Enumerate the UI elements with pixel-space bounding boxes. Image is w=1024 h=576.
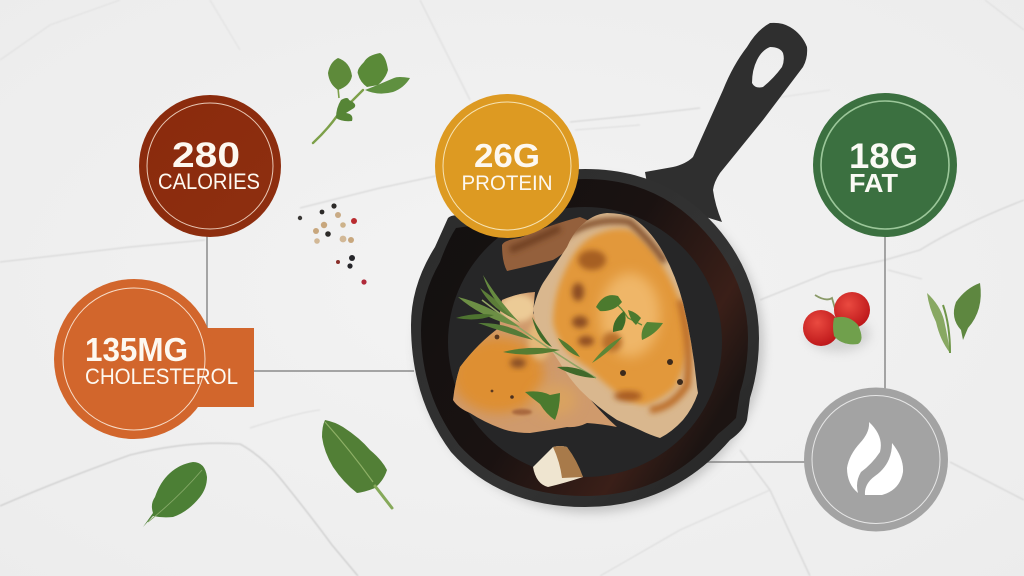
- skillet: [411, 23, 807, 513]
- cherry tomatoes: [803, 292, 870, 352]
- badge: 280 calories: CALORIES: [158, 169, 260, 194]
- badge: 26g protein: 26G: [474, 137, 540, 174]
- skillet body: [411, 169, 759, 507]
- badge: 26g protein: PROTEIN: [462, 172, 552, 195]
- rosemary and leaf: right: [927, 283, 981, 353]
- chicken breast: [533, 213, 698, 438]
- badge: flame icon: [804, 388, 948, 532]
- icon: flame: [847, 422, 903, 495]
- chicken thigh: [453, 292, 617, 433]
- badge: 135mg cholesterol: 135MG: [85, 331, 188, 368]
- badge: 18g fat: FAT: [849, 168, 898, 198]
- rosemary and parsley on chicken: [456, 275, 663, 420]
- badge: 18g fat: 18G: [849, 137, 918, 176]
- herb sprig: top left: [313, 53, 410, 143]
- badge: 280 calories: 280: [172, 136, 240, 175]
- badge: 280 calories: [139, 95, 281, 237]
- basil leaf: bottom centre: [322, 420, 392, 508]
- connector lines: [207, 236, 885, 462]
- skillet inner wall: [421, 179, 748, 496]
- char spots: [620, 359, 683, 385]
- peppercorns: [298, 203, 367, 285]
- badge: 26g protein: [435, 94, 579, 238]
- badge: 135mg cholesterol: [54, 279, 254, 439]
- skillet shadow: [416, 177, 764, 513]
- badge: 18g fat: [813, 93, 957, 237]
- badge: 135mg cholesterol: CHOLESTEROL: [85, 364, 238, 389]
- chicken drumstick: [502, 217, 592, 271]
- skillet handle: [645, 23, 807, 222]
- spinach leaf: bottom left: [143, 462, 207, 527]
- chicken piece in pan: [533, 446, 583, 487]
- skillet cooking surface: [448, 207, 722, 477]
- chicken: [445, 205, 705, 487]
